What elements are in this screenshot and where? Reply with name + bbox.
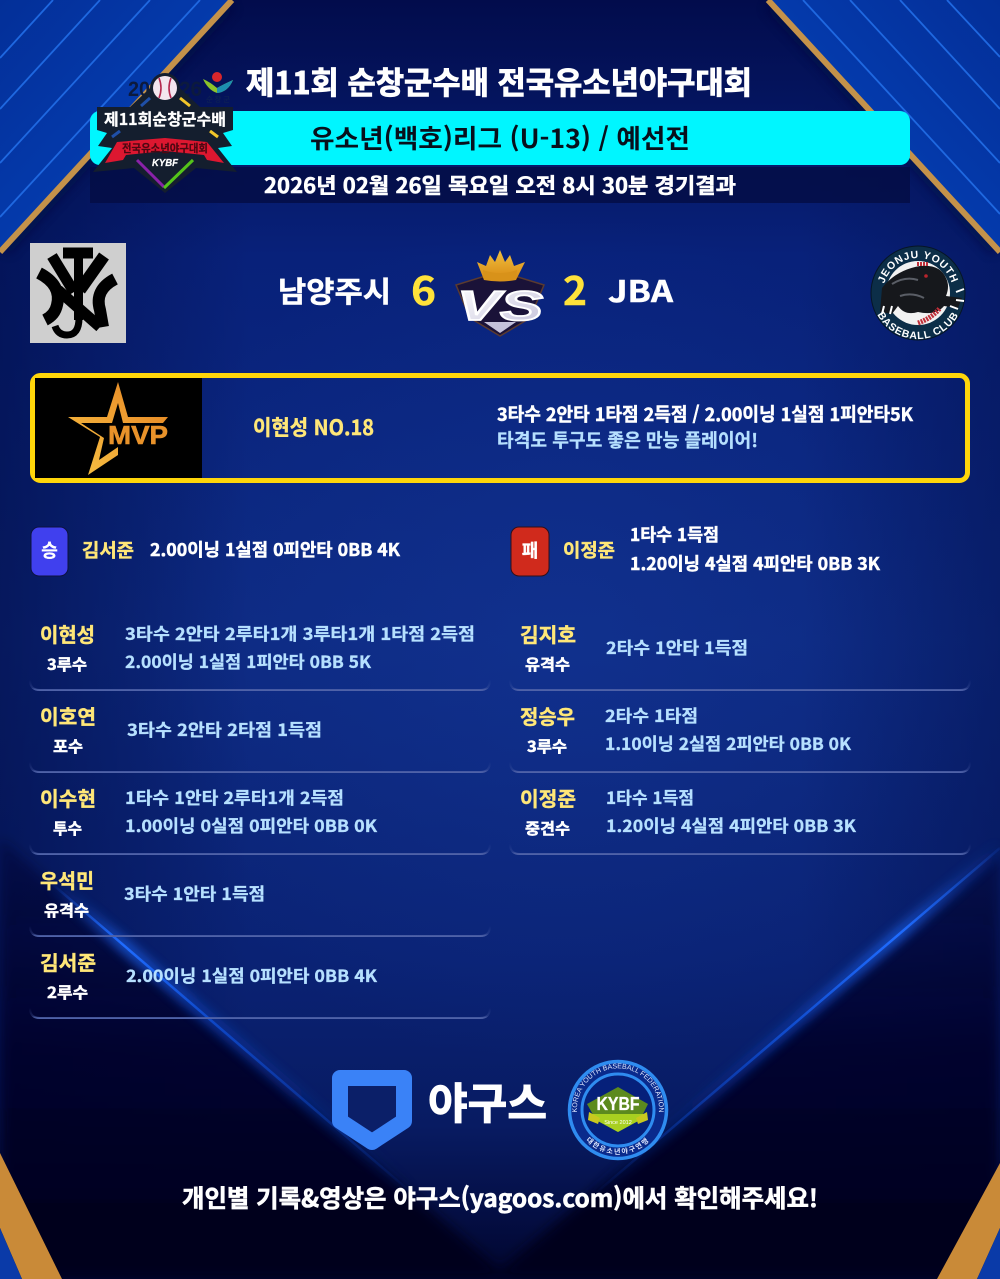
loss badge: [511, 527, 549, 576]
logo text bottom: BASEBALL CLUB: [878, 311, 958, 340]
player row: 이현성: [30, 619, 490, 690]
purple line: [137, 160, 164, 187]
Yagoos wordmark: 야구스: [428, 1070, 547, 1132]
player row: 이현성: 2.00이닝 1실점 1피안타 0BB 5K: [125, 648, 371, 673]
player row: 정승우: 2타수 1타점: [605, 702, 698, 727]
panel: home players: [30, 619, 490, 1018]
KYBF mark: KYBF: [152, 158, 179, 169]
emblem band: [97, 107, 233, 130]
player row: 이호연: [30, 701, 490, 772]
federation Korean name: 대한유소년야구연맹: [586, 1136, 648, 1155]
year label left: 20: [128, 78, 150, 101]
logo text top: JEONJU YOUTH: [878, 250, 958, 283]
losing pitcher batting: 1타수 1득점: [630, 522, 719, 547]
year label right: 26: [179, 78, 202, 101]
player row: 이현성: 3타수 2안타 2루타1개 3루타1개 1타점 2득점: [125, 620, 475, 645]
home score: 6: [411, 261, 436, 317]
player row: 정승우: [510, 701, 970, 772]
MVP player: 이현성 NO.18: [253, 412, 374, 442]
icon: Yagoos home plate: [340, 1078, 404, 1142]
league text: 유소년(백호)리그 (U-13) / 예선전: [310, 119, 690, 156]
win badge: 승: [41, 537, 58, 563]
date bar: [90, 167, 910, 203]
player row: 이수현: 투수: [53, 817, 82, 839]
logo: tournament emblem: [93, 73, 237, 193]
player row: 정승우: 정승우: [520, 701, 575, 730]
panel: losing pitcher: [511, 522, 881, 576]
losing pitcher name: 이정준: [563, 537, 615, 563]
home team name: 남양주시: [278, 269, 391, 311]
player row: 이현성: 3루수: [47, 653, 87, 675]
player row: 이수현: 이수현: [40, 783, 96, 812]
player row: 우석민: 우석민: [40, 865, 94, 894]
player row: 이정준: 중견수: [525, 817, 570, 839]
player row: 우석민: 유격수: [44, 899, 89, 921]
player row: 이정준: 1타수 1득점: [606, 784, 694, 809]
player row: 김서준: 2루수: [47, 981, 88, 1003]
panel: winning pitcher: [31, 527, 401, 576]
ribbon text: 전국유소년야구대회: [122, 140, 208, 156]
winning pitcher stats: 2.00이닝 1실점 0피안타 0BB 4K: [150, 537, 401, 562]
panel: MVP: [32, 376, 968, 480]
federation name: KOREA YOUTH BASEBALL FEDERATION: [572, 1064, 664, 1112]
player row: 우석민: 3타수 1안타 1득점: [124, 880, 265, 905]
red ribbon: [105, 138, 224, 163]
player row: 이정준: 이정준: [520, 783, 576, 812]
player row: 이호연: 3타수 2안타 2타점 1득점: [127, 716, 322, 741]
panel: away players: [510, 619, 970, 854]
date text: 2026년 02월 26일 목요일 오전 8시 30분 경기결과: [264, 170, 736, 200]
player row: 김서준: 2.00이닝 1실점 0피안타 0BB 4K: [126, 962, 377, 987]
green line: [164, 160, 193, 188]
away score: 2: [563, 261, 587, 317]
VS logo: VS: [457, 282, 543, 329]
player row: 이현성: 이현성: [40, 619, 95, 648]
player row: 정승우: 1.10이닝 2실점 2피안타 0BB 0K: [605, 730, 851, 755]
player row: 김서준: [30, 947, 490, 1018]
player row: 김지호: 김지호: [520, 619, 576, 648]
footer message: 개인별 기록&영상은 야구스(yagoos.com)에서 확인해주세요!: [182, 1180, 818, 1215]
player row: 김지호: 유격수: [525, 653, 570, 675]
home team logo: [30, 243, 126, 343]
logo: Sunchang county mark: [203, 72, 233, 105]
winning pitcher name: 김서준: [82, 537, 134, 563]
league bar: [90, 111, 910, 165]
away team logo: [870, 246, 966, 340]
KYBF label: KYBF: [596, 1094, 640, 1114]
player row: 이정준: [510, 783, 970, 854]
baseball: [153, 76, 177, 100]
player row: 이수현: 1.00이닝 0실점 0피안타 0BB 0K: [125, 812, 377, 837]
player row: 김지호: 2타수 1안타 1득점: [606, 634, 748, 659]
player row: 이정준: 1.20이닝 4실점 4피안타 0BB 3K: [606, 812, 856, 837]
player row: 이호연: 포수: [53, 735, 83, 757]
MVP stats: 3타수 2안타 1타점 2득점 / 2.00이닝 1실점 1피안타5K: [497, 401, 913, 427]
icon: MVP star: [68, 382, 168, 475]
player row: 이수현: 1타수 1안타 2루타1개 2득점: [125, 784, 344, 809]
player row: 김서준: 김서준: [40, 947, 96, 976]
player row: 이호연: 이호연: [40, 701, 96, 730]
player row: 정승우: 3루수: [527, 735, 567, 757]
away team name: JBA: [608, 267, 674, 311]
losing pitcher stats: 1.20이닝 4실점 4피안타 0BB 3K: [630, 551, 881, 576]
win badge: [31, 527, 68, 576]
player row: 김지호: [510, 619, 970, 690]
loss badge: 패: [522, 537, 538, 563]
VS logo: [456, 250, 544, 336]
MVP comment: 타격도 투구도 좋은 만능 플레이어!: [497, 427, 758, 453]
player row: 이수현: [30, 783, 490, 854]
emblem name: 제11회순창군수배: [104, 106, 226, 130]
MVP star label: MVP: [108, 420, 168, 450]
since label: Since 2012: [604, 1120, 632, 1126]
title: 제11회 순창군수배 전국유소년야구대회: [246, 58, 752, 103]
player row: 우석민: [30, 865, 490, 936]
logo: KYBF federation: [568, 1060, 668, 1160]
county name: 순창군: [206, 94, 230, 105]
